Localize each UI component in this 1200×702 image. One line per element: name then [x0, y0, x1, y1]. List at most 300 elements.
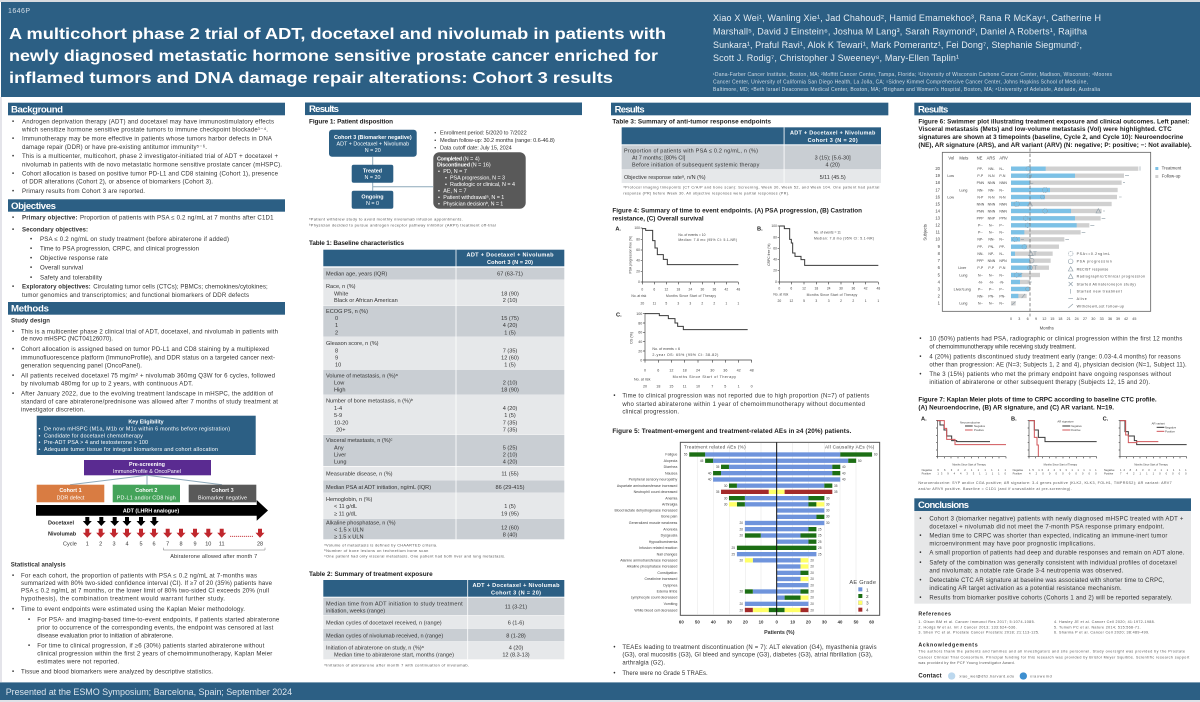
table 2: treatment exposure: initiation, weeks (range): [326, 608, 385, 614]
heading: results: Results: [615, 104, 645, 115]
chart: KM by AR variant: Positive: [1104, 472, 1114, 476]
references: References: [918, 611, 951, 617]
row labels: Race, n (%): [326, 284, 356, 290]
dosing schedule: Nivolumab: [48, 532, 77, 538]
table 3: response endpoints: 5/11 (45.5): [820, 175, 846, 181]
row labels: Median age, years (IQR): [326, 272, 387, 278]
row labels: Volume of metastasis, n (%)ᵃ: [326, 374, 399, 380]
study design text: Study design: [11, 317, 50, 324]
chart: KM castration resistance: CRPC free (%): [767, 244, 771, 266]
right value labels: 35: [834, 490, 838, 494]
row values: 12 (60): [501, 525, 519, 531]
table 1: baseline characteristics: [323, 250, 564, 540]
row labels: ECOG PS, n (%): [326, 309, 368, 315]
subject numbers: 9: [938, 244, 941, 249]
adverse event labels: Lymphocyte count decreased: [631, 596, 677, 600]
CTC signature codes: P--: [989, 287, 994, 291]
chart: KM overall survival: No. at risk: [634, 377, 651, 381]
chart: KM overall survival: Months Since Start of Therapy: [673, 375, 736, 379]
heading: results: [611, 103, 888, 115]
heading: results: [914, 103, 1191, 115]
left value labels: 20: [739, 590, 743, 594]
cohort 2 box: [113, 485, 180, 502]
right value labels: 60: [874, 453, 878, 457]
authors: Marshall⁵, David J Einstein⁶, Joshua M Lang³, Sarah Raymond², Daniel A Roberts¹, Rajitha: [713, 26, 1087, 36]
left value labels: [684, 453, 743, 612]
discontinuation box: •: [438, 188, 440, 194]
table 2: treatment exposure: ADT + Docetaxel + Nivolumab: [472, 583, 560, 589]
study design text: investigator discretion.: [21, 406, 85, 413]
x axis: 60: [679, 619, 684, 624]
swimmer plot notes continued: other than progression: AE (N=3; Subjects 1, 2 and 4), physician decision (N=1, Subject 11).: [929, 363, 1187, 369]
swimmer plot notes continued: 4 (20%) patients discontinued study treatment early (range: 0.03-4.4 months) for reasons: [929, 355, 1181, 361]
row labels: Hemoglobin, n (%): [326, 497, 372, 503]
chart: KM PSA progression: 0: [638, 280, 640, 284]
adverse event labels: Arthralgia: [662, 502, 677, 506]
x axis: 3: [1018, 317, 1020, 321]
background bullet text: of DDR alterations (Cohort 2), or absence of biomarkers (Cohort 3).: [22, 179, 213, 186]
statistical analysis text: estimates were not reported.: [37, 658, 120, 665]
table 2: treatment exposure: Median cycles of docetaxel received, n (range): [326, 620, 442, 626]
chart: KM by AR signature: Negative: [1071, 424, 1082, 428]
chart: KM castration resistance: Median: 7.8 mo (95% CI: 5.1-NR): [814, 236, 874, 240]
chart: KM by AR variant: C.: [1103, 416, 1109, 422]
CTC signature codes: N--: [978, 273, 983, 277]
conclusions bullet text: and nivolumab; a notable rate Grade 3-4 neutropenia was observed.: [929, 568, 1124, 574]
chart: KM overall survival: 0: [644, 368, 646, 372]
subject numbers: 3: [938, 286, 941, 291]
swimmer plot notes: of chemoimmunotherapy while receiving study treatment.: [929, 345, 1076, 351]
row labels: Alkaline phosphatase, n (%): [326, 520, 396, 526]
chart: KM by neuroendocrine: Negative: [922, 468, 933, 472]
conclusions bullet text: •: [919, 551, 921, 557]
references: 6. Sharma P et al. Cancer Cell 2020; 38:489-499.: [1054, 631, 1149, 635]
CTC signature codes: PN-: [988, 294, 994, 298]
study schema diagram: [36, 416, 268, 560]
affiliations: ¹Dana-Farber Cancer Institute, Boston, MA; ²Moffitt Cancer Center, Tampa, Florida; ³University of Wisconsin Carbone Cancer Center, Madison, Wisconsin; ⁴Moores: [713, 72, 1112, 78]
chart: KM castration resistance: 3: [828, 299, 830, 303]
adverse event labels: Bone pain: [661, 515, 677, 519]
row labels: Number of bone metastasis, n (%)ᵇ: [326, 398, 413, 405]
left value labels: 35: [716, 490, 720, 494]
study design text: After January 2022, due to the evolving treatment landscape in mHSPC, the addition of: [21, 391, 273, 398]
chart: KM castration resistance: No. of events = 11: [814, 231, 841, 235]
x axis: 20: [806, 619, 811, 624]
CTC signature codes: -N-: [989, 280, 994, 284]
chart: KM castration resistance: 2: [840, 299, 842, 303]
column headers: ARS: [987, 155, 995, 160]
chart: KM PSA progression: 1: [737, 302, 739, 306]
right value labels: 20: [810, 577, 814, 581]
objectives list: Objective response rate: [40, 255, 109, 262]
enrollment facts: Median follow-up: 30.2 months (range: 0.6-46.8): [440, 138, 555, 144]
chart: KM castration resistance: Months Since Start of Therapy: [807, 293, 858, 297]
volume and metastasis labels: Liver/Lung: [954, 287, 971, 291]
chart: KM by AR signature: 4 2 0 0 0 0 0 0 0 0 0: [1029, 472, 1097, 476]
subject numbers: 2: [938, 293, 941, 298]
row values: 7 (35): [503, 420, 517, 426]
chart: KM by AR signature: B.: [1011, 416, 1017, 422]
pre-screening box: Pre-screening: [129, 462, 165, 468]
x axis: 40: [838, 619, 843, 624]
title: [9, 26, 666, 87]
objectives list: Primary objective:: [22, 215, 78, 222]
adverse event labels: Nausea: [665, 471, 677, 475]
adverse event labels: Blood lactate dehydrogenase increased: [614, 509, 677, 513]
authors: [713, 13, 1101, 63]
CTC signature codes: PP-: [977, 245, 983, 249]
table 1 footnotes: ᶜOne patient had only visceral metastasis. One patient had both liver and lung metastasis.: [324, 554, 505, 559]
time to clinical progression note: •: [613, 394, 615, 400]
chart: KM by neuroendocrine: 6 6 3 2 2 1 1 1 1 1 1: [937, 468, 1007, 472]
conclusions bullet text: •: [919, 595, 921, 601]
chart: KM by AR signature: Positive: [1071, 428, 1081, 432]
enrollment facts: •: [434, 130, 436, 136]
row labels: [326, 272, 431, 540]
x axis: 10: [790, 619, 796, 624]
subject numbers: 18: [935, 180, 941, 185]
CTC signature codes: NNN: [988, 181, 996, 185]
affiliations: Baltimore, MD; ⁶Beth Israel Deaconess Medical Center, Boston, MA; ⁷Brigham and Women's Hospital, Boston, MA; ⁸University of Adelaide, Adelaide, Australia: [713, 87, 1100, 93]
study design text: All patients received docetaxel 75 mg/m² + nivolumab 360mg Q3W for 6 cycles, followed: [21, 373, 275, 380]
discontinuation box: •: [445, 182, 447, 188]
CTC signature codes: N--: [989, 224, 994, 228]
chart: KM PSA progression: 18: [676, 288, 680, 292]
cohort 3 box: Biomarker negative: [198, 495, 247, 501]
row labels: ≥ 1.5 x ULN: [334, 534, 364, 540]
chart: KM castration resistance: 1: [865, 299, 867, 303]
acknowledgements: was provided by the PCF Young Investigator Award.: [918, 661, 1015, 665]
treated box: N = 20: [364, 175, 381, 181]
row values: 4 (20): [503, 460, 517, 466]
contact: Contact: [918, 674, 942, 680]
x axis: 60: [869, 619, 875, 624]
swimmer plot notes continued: The 3 (15%) patients who met the primary endpoint have ongoing responses without: [929, 372, 1171, 378]
CTC signature codes: P-N: [999, 174, 1006, 178]
statistical analysis text: •: [28, 643, 30, 650]
panel: background: [8, 103, 285, 195]
enrollment facts: [434, 130, 555, 151]
left value labels: 20: [739, 602, 743, 606]
left value labels: 30: [724, 484, 728, 488]
subject numbers: 13: [935, 216, 941, 221]
dosing schedule: Docetaxel: [48, 521, 74, 527]
chart: KM PSA progression: 2: [713, 302, 715, 306]
row labels: 8: [335, 348, 338, 354]
right value labels: 40: [842, 471, 846, 475]
row values: 1 (5): [504, 362, 516, 368]
time to clinical progression note: clinical progression.: [622, 410, 679, 416]
cohort 3 box: Cohort 3: [211, 488, 234, 494]
table 3 footnote: ᵃProtocol imaging timepoints (CT C/A/P and bone scan): Screening, Week 30, Week 52, and Week 104. One patient had partial: [623, 186, 880, 190]
figure 1 title: Figure 1: Patient disposition: [309, 119, 393, 126]
row values: 1 (5): [504, 330, 516, 336]
chart: adverse events butterfly chart: [614, 442, 880, 636]
right value labels: [810, 453, 878, 612]
CTC signature codes: PN-: [988, 245, 994, 249]
outcome legend: Radiographic/Clinical progression: [1077, 275, 1145, 279]
figure 6 title: Figure 6: Swimmer plot illustrating treatment exposure and clinical outcomes. Left panel:: [918, 118, 1189, 125]
conclusions bullet text: Safety of the combination was generally consistent with individual profiles of docetaxel: [929, 560, 1177, 566]
discontinuation box: AE, N = 7: [443, 188, 467, 194]
x axis: 42: [1124, 317, 1128, 321]
column headers: ARV: [999, 155, 1008, 160]
discontinuation box: Physician decisionᵇ, N = 1: [443, 201, 503, 207]
x axis: 50: [854, 619, 859, 624]
row labels: 10-20: [334, 420, 348, 426]
outcome legend: Withdrew/Lost follow-up: [1077, 304, 1124, 308]
panel: results column 2: [305, 102, 582, 667]
chart: KM castration resistance: 30: [839, 287, 843, 291]
dosing schedule: Abiraterone allowed after month 7: [170, 554, 257, 560]
objectives list: Time to PSA progression, CRPC, and clinical progression: [40, 245, 199, 252]
outcome legend: Started Abiraterone(on study): [1077, 282, 1136, 286]
dosing schedule: 5: [139, 542, 143, 548]
CTC signature codes: PP-: [977, 167, 983, 171]
row labels: Low: [334, 381, 345, 387]
CTC signature codes: N--: [999, 167, 1004, 171]
legend: AE grade: 1: [866, 587, 869, 592]
statistical analysis text: Tissue and blood biomarkers were analyzed by descriptive statistics.: [21, 669, 213, 676]
right value labels: 20: [810, 596, 814, 600]
CTC signature codes: P-P: [988, 266, 995, 270]
x axis: Patients (%): [764, 630, 795, 636]
table 3: response endpoints: Proportion of patients with PSA ≤ 0.2 ng/mL, n (%): [624, 149, 758, 155]
conclusions bullet text: Median time to CRPC was shorter than expected, indicating an immune-inert tumor: [929, 534, 1167, 540]
dosing schedule: 28: [257, 542, 263, 548]
subject numbers: 8: [938, 251, 941, 256]
CTC signature codes: NN-: [988, 167, 995, 171]
row labels: 1: [335, 323, 338, 329]
chart: KM PSA progression: 3: [689, 302, 691, 306]
right value labels: 25: [818, 540, 822, 544]
chart: KM PSA progression: 30: [700, 288, 704, 292]
table 2: treatment exposure: 12 (8.3-13): [502, 653, 530, 659]
chart: KM by AR signature: Positive: [1013, 472, 1022, 476]
chart: KM castration resistance: 0: [778, 287, 780, 291]
discontinuation box: •: [438, 195, 440, 201]
chart: KM castration resistance: 24: [827, 287, 831, 291]
heading: objectives: [8, 199, 285, 212]
objectives list: •: [12, 226, 14, 233]
CTC signature codes: N--: [989, 302, 994, 306]
study design text: generation sequencing panel (OncoPanel).: [21, 362, 142, 369]
table 1 footnotes: [324, 542, 505, 559]
cohort 3 box: ADT + Docetaxel + Nivolumab: [336, 141, 409, 147]
dosing schedule: 4: [125, 542, 129, 548]
chart: KM by neuroendocrine: 13 9 4 4 3 3 1 1 1 1 0: [937, 472, 1007, 476]
legend: AE grade: 3: [866, 601, 869, 606]
volume and metastasis labels: Low: [947, 195, 954, 199]
x axis: 15: [1050, 317, 1054, 321]
arrow: ADT backbone: [36, 500, 268, 521]
chart: KM PSA progression: Months Since Start of Therapy: [666, 294, 716, 298]
CTC signature codes: N-N: [988, 174, 995, 178]
chart: KM overall survival: 18: [683, 368, 687, 372]
background bullet text: Cohort allocation is based on positive tumor PD-L1 and CD8 staining (Cohort 1), presence: [22, 171, 279, 178]
objectives list: •: [12, 215, 14, 222]
right value labels: 30: [826, 496, 830, 500]
swimmer plot notes: [919, 337, 1182, 351]
discontinuation box: [433, 152, 526, 209]
dosing schedule: 6: [152, 542, 156, 548]
background bullet text: damage repair (DDR) or have pre-existing antitumor immunity⁵⁻⁶.: [22, 144, 207, 151]
row labels: Median PSA at ADT initiation, ng/mL (IQR): [326, 485, 431, 491]
conclusions bullet text: •: [919, 517, 921, 523]
adverse event labels: Alkaline phosphatase increased: [627, 565, 677, 569]
figure 7 footnote: [918, 481, 1172, 491]
swimmer plot notes continued: [919, 355, 1187, 386]
conclusions body background: [914, 511, 1191, 604]
chart: KM overall survival: OS (%): [630, 332, 634, 344]
chart: KM by AR variant: AR variant: [1152, 422, 1165, 426]
row values: 1 (5): [504, 413, 516, 419]
table 3: response endpoints: Cohort 3 (N = 20): [808, 138, 858, 144]
figure 1 footnotes: ᵃPatient withdrew study to avoid monthly nivolumab infusion appointments.: [309, 217, 463, 222]
subject numbers: 11: [936, 230, 941, 235]
chart: KM overall survival: 0: [751, 384, 753, 388]
CTC signature codes: P-P: [977, 174, 984, 178]
adverse event labels: Diarrhea: [664, 465, 677, 469]
adverse event labels: Generalized muscle weakness: [629, 521, 678, 525]
bars: [689, 452, 872, 612]
CTC signature codes: PPP: [977, 259, 984, 263]
CTC signature codes: N--: [999, 188, 1004, 192]
CTC signature codes: PPN: [999, 217, 1007, 221]
row values: 11 (55): [501, 472, 519, 478]
chart: KM PSA progression: Median: 7.8 mo (95% CI: 5.1-NR): [678, 238, 737, 242]
right value labels: 25: [818, 552, 822, 556]
chart: KM overall survival: 1: [738, 384, 740, 388]
table 2: treatment exposure: Initiation of abiraterone on study, n (%)ᵃ: [326, 645, 425, 651]
table 3: response endpoints: At 7 months; [80% CI]: [632, 156, 686, 162]
table 2: treatment exposure: 6 (1-6): [508, 620, 524, 626]
key eligibility box: Candidate for docetaxel chemotherapy: [44, 434, 143, 440]
chart: KM PSA progression: No. at risk: [631, 294, 647, 298]
key eligibility box: •: [38, 434, 40, 440]
x axis: 21: [1067, 317, 1071, 321]
CTC signature codes: PP-: [999, 245, 1005, 249]
x axis: 30: [822, 619, 827, 624]
chart: KM overall survival: [616, 312, 754, 388]
heading: methods: Methods: [11, 304, 49, 315]
CTC signature codes: N--: [999, 231, 1004, 235]
x axis: 0: [1010, 317, 1012, 321]
chart: KM overall survival: C.: [616, 312, 622, 318]
treated box: [352, 165, 393, 183]
volume and metastasis labels: Lung: [959, 302, 967, 306]
chart: KM overall survival: 2-year OS: 65% (95% CI: 38-82): [652, 353, 718, 357]
chart: KM PSA progression: 36: [712, 288, 716, 292]
table 3: response endpoints: [622, 127, 881, 183]
chart: KM castration resistance: 42: [864, 287, 868, 291]
objectives list: •: [30, 255, 32, 262]
key eligibility box: Key Eligibility: [128, 420, 164, 426]
chart: KM PSA progression: 42: [724, 288, 728, 292]
CTC signature codes: NPN: [999, 259, 1007, 263]
row values: 1 (5): [504, 504, 516, 510]
chart: KM overall survival: 48: [750, 368, 754, 372]
row labels: 0: [335, 316, 338, 322]
left value labels: 20: [739, 608, 743, 612]
chart: KM PSA progression: A.: [615, 227, 621, 233]
title: inflamed tumors and DNA damage repair alterations: Cohort 3 results: [9, 70, 613, 87]
treatment and follow-up legend: Treatment: [1162, 166, 1182, 171]
key eligibility box: [37, 416, 256, 455]
heading: results: Results: [309, 104, 339, 115]
swimmer plot notes continued: •: [919, 372, 921, 378]
x axis: 30: [727, 619, 732, 624]
row labels: 20+: [336, 428, 346, 434]
chart: KM by neuroendocrine: Neuroendocrine: [960, 420, 981, 424]
conclusions bullet text: Detectable CTC AR signature at baseline was associated with shorter time to CRPC,: [929, 578, 1165, 584]
contact: [918, 672, 1052, 680]
statistical analysis text: prior to occurrence of the corresponding events, the endpoint was censored at last: [37, 624, 274, 631]
enrollment facts: •: [434, 138, 436, 144]
left value labels: 35: [716, 465, 720, 469]
statistical analysis text: summarized with 80% two-sided confidence interval (CI). If ≥7 of 20 (35%) patients have: [21, 580, 273, 587]
row values: 18 (90): [501, 291, 519, 297]
figure 1 footnotes: [309, 217, 496, 227]
column headers: Mets: [959, 155, 968, 160]
references: 2. Hodgs W et al. Int J Cancer 2013; 133:624-636.: [918, 625, 1017, 629]
chart: KM PSA progression: 40: [636, 259, 640, 263]
acknowledgements: The authors thank the patients and families and all investigators and site personnel. Study oversight was provided by the Prostate: [918, 649, 1185, 653]
chart: KM castration resistance: 18: [814, 287, 818, 291]
row values: 2 (10): [503, 298, 517, 304]
cohort 2 box: PD-L1 and/or CD8 high: [117, 495, 176, 501]
chart: KM PSA progression: 6: [653, 288, 655, 292]
enrollment facts: Data cutoff date: July 15, 2024: [440, 145, 512, 151]
cohort 3 box: [329, 130, 417, 157]
key eligibility box: •: [38, 426, 40, 432]
end of line arrows: [1065, 166, 1140, 239]
study design text: [11, 317, 278, 413]
cohort 3 box: Cohort 3 (Biomarker negative): [334, 135, 412, 141]
objectives list: Overall survival: [40, 265, 83, 272]
CTC signature codes: P--: [999, 224, 1004, 228]
chart: KM castration resistance: 12: [789, 299, 793, 303]
chart: KM castration resistance: 40: [773, 257, 777, 261]
discontinuation box: Radiologic or clinical, N = 4: [450, 182, 515, 188]
panel: conclusions: [914, 498, 1191, 680]
poster number: 1646P: [8, 8, 30, 15]
dosing schedule: 8: [179, 542, 183, 548]
adverse events notes: [613, 645, 877, 677]
chart: KM castration resistance: 1: [877, 299, 879, 303]
dosing schedule: Cycle: [63, 542, 77, 548]
discontinuation box: (N = 16): [471, 163, 491, 169]
CTC signature codes: N--: [999, 273, 1004, 277]
CTC signature codes: NN-: [988, 188, 995, 192]
volume and metastasis labels: [947, 174, 971, 306]
chart: KM PSA progression: [615, 226, 740, 306]
row values: 15 (75): [501, 316, 519, 322]
chart: KM overall survival: 24: [696, 368, 700, 372]
x axis: 36: [1108, 317, 1112, 321]
CTC signature codes: -N-: [999, 280, 1004, 284]
statistical analysis text: hypothesis), the combination treatment would warrant further study.: [21, 596, 225, 603]
conclusions bullet text: docetaxel + nivolumab did not meet the 7-month PSA response primary endpoint.: [929, 524, 1165, 530]
right value labels: 20: [810, 602, 814, 606]
statistical analysis text: For each cohort, the proportion of patients with PSA ≤ 0.2 ng/mL at 7-months was: [21, 573, 257, 580]
swimmer plot notes continued: •: [919, 355, 921, 361]
background bullet text: •: [12, 153, 14, 160]
chart: KM overall survival: 10: [696, 384, 700, 388]
CTC signature codes: N--: [989, 273, 994, 277]
volume and metastasis labels: Lung: [959, 188, 967, 192]
discontinuation box: •: [438, 201, 440, 207]
